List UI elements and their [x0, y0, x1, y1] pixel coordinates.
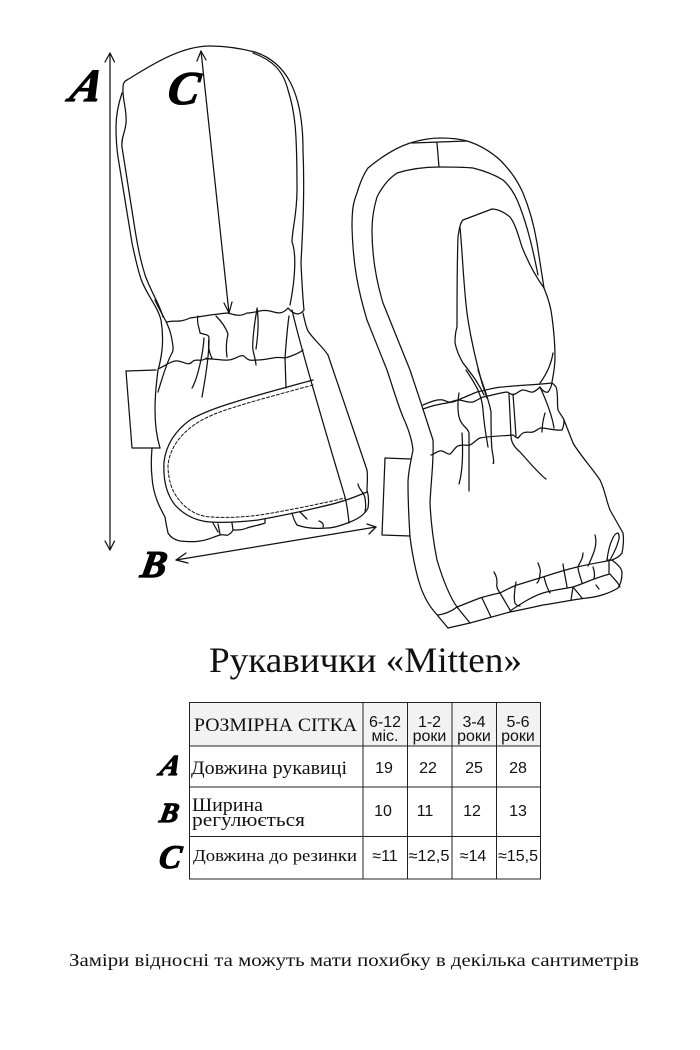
mitten body outline: [127, 46, 304, 310]
row C: ≈12,5: [408, 848, 450, 865]
row A: Довжина рукавиці: [191, 759, 347, 779]
row A: 28: [509, 760, 527, 777]
row C: ≈11: [372, 848, 398, 865]
cuff wrinkles: [482, 535, 599, 617]
seam lines and cuff: [292, 310, 349, 523]
table header background: [190, 702, 540, 746]
age columns: роки: [457, 728, 491, 745]
label A: A: [61, 61, 111, 112]
age columns: [369, 714, 535, 745]
age columns: 1-2: [418, 714, 441, 731]
table label C: C: [157, 839, 185, 876]
footnote: Заміри відносні та можуть мати похибку в декілька сантиметрів: [69, 950, 639, 970]
age columns: 5-6: [506, 714, 530, 731]
row B: 11: [417, 803, 433, 820]
row B: Ширина: [192, 796, 263, 816]
illustration: mitten seen from the palm side: [352, 138, 623, 628]
velcro strap: [164, 380, 367, 522]
arrow A: full mitten length: [105, 53, 114, 550]
row B: 12: [463, 803, 481, 820]
row B: [192, 796, 527, 831]
row A: 25: [465, 760, 483, 777]
outer contour: [367, 320, 448, 628]
age columns: роки: [413, 728, 446, 745]
table label A: A: [154, 750, 186, 782]
label B: B: [137, 544, 170, 586]
cuff: [448, 420, 623, 628]
table label B: B: [156, 798, 182, 829]
illustration: mitten seen from the strap side: [116, 46, 369, 542]
thumb: [463, 209, 555, 382]
age columns: 3-4: [462, 714, 486, 731]
inner contour: [383, 303, 470, 623]
row B: 10: [374, 803, 392, 820]
cuff band: [438, 560, 612, 615]
arrow C: length to elastic: [197, 51, 232, 313]
age columns: роки: [501, 728, 535, 745]
age columns: 6-12: [369, 714, 401, 731]
strap stitching: [168, 385, 345, 517]
row C: ≈15,5: [498, 848, 538, 865]
row A: [191, 759, 527, 779]
row A: 19: [375, 760, 393, 777]
elastic band: [423, 383, 552, 405]
table grid: [190, 702, 540, 879]
wrist elastic: [167, 308, 304, 322]
table heading: РОЗМІРНА СІТКА: [194, 715, 357, 736]
row B: 13: [509, 803, 527, 820]
row C: ≈14: [460, 848, 486, 865]
arrow B: width: [176, 524, 376, 563]
age columns: міс.: [372, 728, 398, 745]
top seam: [412, 141, 467, 167]
row B: регулюється: [192, 811, 306, 831]
size table: [190, 702, 540, 879]
row C: Довжина до резинки: [193, 846, 357, 865]
side tag: [382, 458, 411, 536]
row C: [193, 846, 538, 865]
title: Рукавички «Mitten»: [209, 640, 522, 680]
row A: 22: [419, 760, 437, 777]
label C: C: [165, 63, 204, 115]
cuff loop: [607, 533, 619, 573]
side tag: [126, 370, 160, 448]
